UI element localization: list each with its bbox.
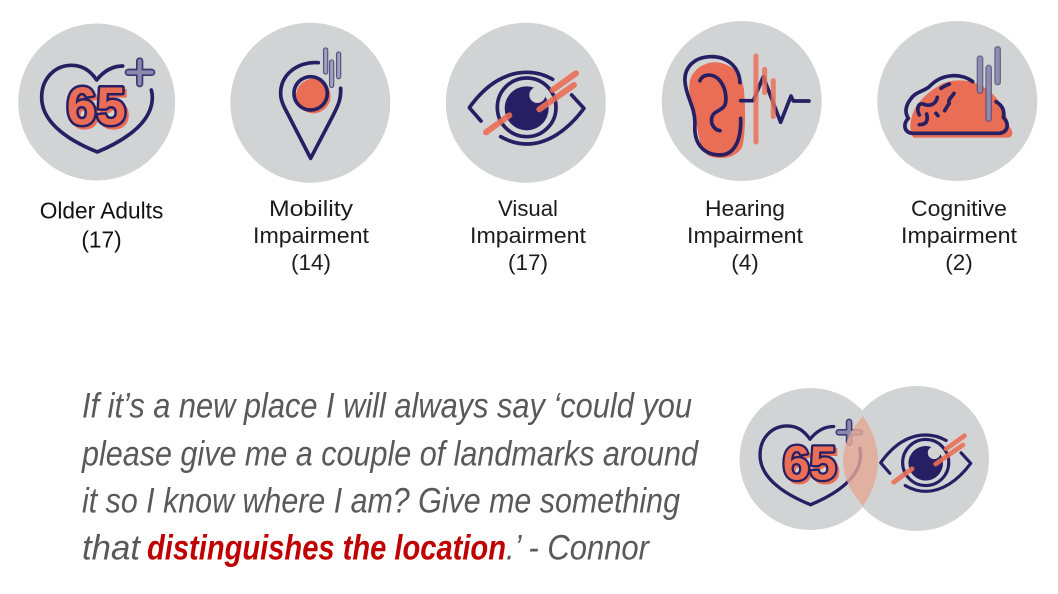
label: older adults: (17) xyxy=(81,226,122,252)
icon: brain xyxy=(905,49,1012,138)
icon: heart 65+ xyxy=(42,61,152,152)
icon circle: mobility xyxy=(230,23,390,183)
label: hearing impairment xyxy=(687,196,804,275)
label: hearing impairment: Hearing xyxy=(705,196,785,221)
panel: hearing impairment xyxy=(662,21,822,275)
label: mobility impairment: Mobility xyxy=(269,196,354,221)
label: older adults xyxy=(40,198,163,252)
label: cognitive impairment: Cognitive xyxy=(911,196,1007,221)
label: visual impairment: Impairment xyxy=(470,223,587,248)
label: hearing impairment: Impairment xyxy=(687,223,804,248)
quote text xyxy=(81,387,699,568)
venn icon: eye xyxy=(881,435,971,491)
venn icon: heart 65+: 65 xyxy=(785,439,839,493)
label: cognitive impairment: (2) xyxy=(945,250,973,275)
label: cognitive impairment: Impairment xyxy=(901,223,1018,248)
label: mobility impairment xyxy=(253,196,370,275)
icon circle: cognitive xyxy=(877,21,1037,181)
panel: visual impairment xyxy=(446,23,606,275)
icon circle: hearing xyxy=(662,21,822,181)
icon circle: visual xyxy=(446,23,606,183)
venn icon: heart 65+: 65 xyxy=(783,437,837,491)
venn icon: heart 65+: 65 xyxy=(783,437,837,491)
venn diagram: older adults and visual impairment xyxy=(740,386,989,531)
icon: heart 65+: 65 xyxy=(67,77,126,136)
quote text: If it’s a new place I will always say ‘could you xyxy=(82,387,692,426)
quote text: it so I know where I am? Give me something xyxy=(82,482,680,521)
panel: mobility impairment xyxy=(230,23,390,275)
panel: cognitive impairment xyxy=(877,21,1037,275)
label: mobility impairment: (14) xyxy=(291,250,331,275)
label: visual impairment xyxy=(470,196,587,275)
venn overlap xyxy=(843,416,878,506)
icon: eye xyxy=(469,72,584,144)
venn icon: heart 65+ xyxy=(760,422,861,505)
label: older adults: Older Adults xyxy=(40,198,163,224)
quote text: please give me a couple of landmarks around xyxy=(81,435,699,474)
label: visual impairment: Visual xyxy=(498,196,558,221)
highlighted phrase: distinguishes the location xyxy=(147,528,506,568)
icon circle: older adults xyxy=(18,24,175,180)
icon: heart 65+: 65 xyxy=(69,80,129,139)
panel: older adults xyxy=(18,24,175,252)
venn circle: older adults xyxy=(740,388,882,530)
label: cognitive impairment xyxy=(901,196,1018,275)
quote text: .’ - Connor xyxy=(506,528,650,568)
quote text: that xyxy=(82,528,141,568)
label: visual impairment: (17) xyxy=(508,250,548,275)
icon: location pin xyxy=(281,50,341,158)
venn circle: visual impairment xyxy=(844,386,989,531)
label: mobility impairment: Impairment xyxy=(253,223,370,248)
label: hearing impairment: (4) xyxy=(731,250,759,275)
icon: heart 65+: 65 xyxy=(67,77,126,136)
icon: ear and sound wave xyxy=(685,56,809,158)
